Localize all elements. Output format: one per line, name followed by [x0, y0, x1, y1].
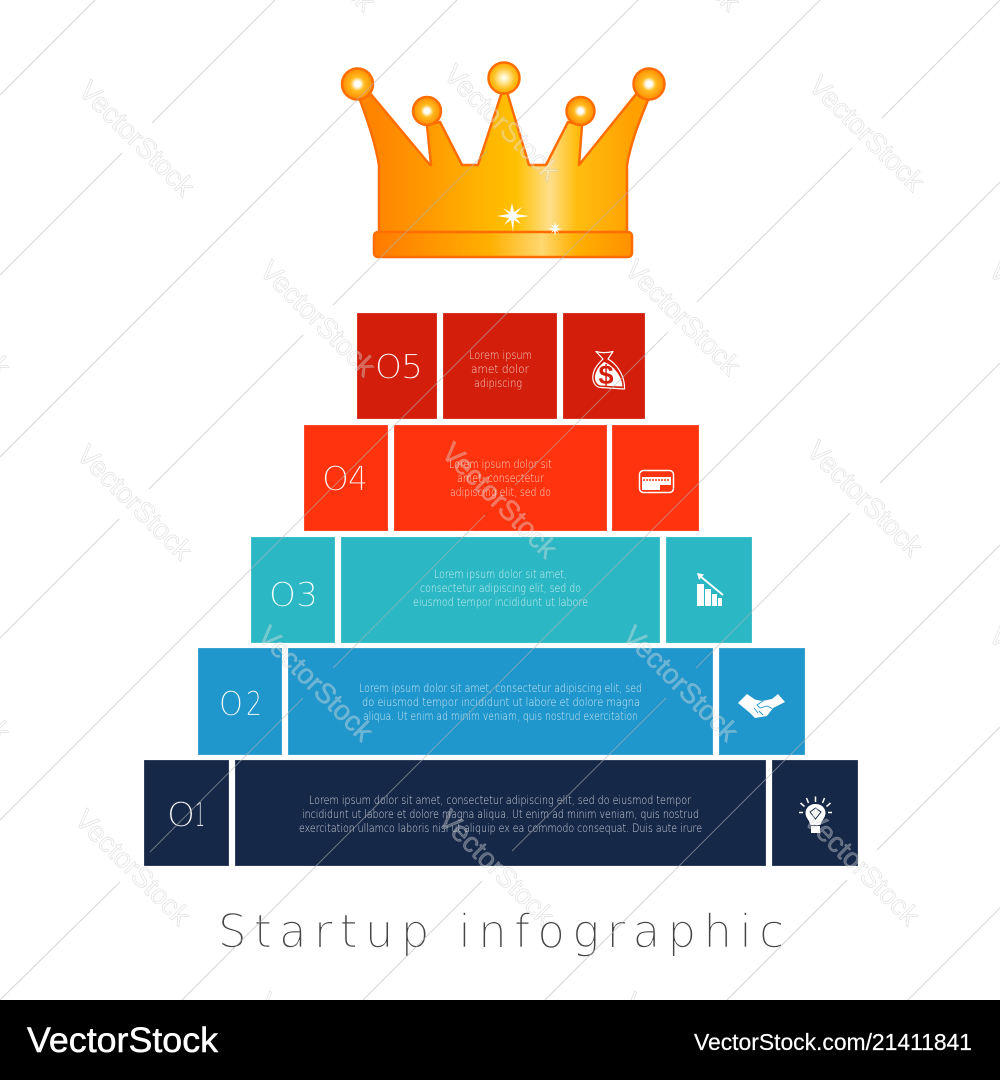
- icon tile: credit card: [612, 425, 699, 531]
- watermarks: VectorStock: [803, 70, 931, 198]
- panel: tier 4: [304, 425, 699, 531]
- icon tile: light bulb: [772, 760, 858, 866]
- number tile 01: O: [167, 795, 195, 834]
- text tile 03: consectetur adipiscing elit, sed do: [420, 581, 581, 595]
- number tile 02: O: [219, 684, 243, 723]
- text tile 04: amet, consectetur: [457, 471, 544, 485]
- watermarks: VectorStock: [73, 75, 201, 203]
- crown spikes and body: [360, 92, 648, 235]
- number tile 02: 2: [246, 684, 262, 723]
- number tile 01: [144, 760, 229, 866]
- watermarks: VectorStock: [69, 804, 197, 932]
- number tile 04: O: [322, 459, 349, 498]
- text tile 02: do eiusmod tempor incididunt ut labore et dolore magna: [362, 695, 640, 709]
- number tile 05: O: [375, 347, 402, 386]
- icon tile: money bag: [563, 313, 645, 419]
- text tile 04: adipiscing elit, sed do: [450, 485, 551, 499]
- text tile 02: Lorem ipsum dolor sit amet, consectetur adipiscing elit, sed: [359, 681, 642, 695]
- text tile 04: [394, 425, 607, 531]
- crown sparkles: [497, 203, 562, 236]
- watermarks: VectorStock: [71, 439, 199, 567]
- text tile 03: Lorem ipsum dolor sit amet,: [434, 567, 567, 581]
- watermarks: VectorStock: [433, 804, 561, 932]
- icon tile: money bag: $: [598, 360, 614, 390]
- number tile 01: 1: [195, 795, 205, 834]
- text tile 05: Lorem ipsum: [469, 348, 532, 362]
- title: Startup infographic: [218, 905, 784, 958]
- panel: tier 3: [251, 537, 752, 643]
- text tile 03: eiusmod tempor incididunt ut labore: [413, 595, 588, 609]
- icon tile: falling bar chart: [666, 537, 752, 643]
- watermarks: VectorStock: [254, 255, 382, 383]
- text tile 04: Lorem ipsum dolor sit: [449, 457, 552, 471]
- text tile 05: adipiscing: [474, 376, 522, 390]
- crown: [342, 62, 664, 257]
- crown balls: [342, 62, 664, 125]
- watermarks: VectorStock: [252, 620, 380, 748]
- footer bar: [0, 1000, 1000, 1080]
- number tile 03: 3: [296, 575, 318, 614]
- watermarks: VectorStock: [438, 59, 566, 187]
- number tile 04: 4: [348, 459, 368, 498]
- number tile 03: O: [269, 575, 296, 614]
- text tile 02: [288, 648, 713, 755]
- text tile 01: exercitation ullamco laboris nisi ut aliquip ex ea commodo consequat. Duis aute irure: [299, 821, 702, 835]
- text tile 01: Lorem ipsum dolor sit amet, consectetur adipiscing elit, sed do eiusmod tempor: [309, 793, 691, 807]
- watermarks: VectorStock: [798, 804, 926, 932]
- crown band: [374, 232, 632, 257]
- text tile 05: amet dolor: [471, 362, 529, 376]
- footer logo: VectorStock: [27, 1021, 219, 1060]
- panel: tier 2: [198, 648, 805, 755]
- text tile 02: aliqua. Ut enim ad minim veniam, quis nostrud exercitation: [363, 709, 638, 723]
- text tile 03: [341, 537, 660, 643]
- number tile 05: [357, 313, 437, 419]
- number tile 05: 5: [401, 347, 423, 386]
- text tile 05: [443, 313, 557, 419]
- panel: tier 1: [144, 760, 858, 866]
- text tile 01: [235, 760, 766, 866]
- number tile 04: [304, 425, 388, 531]
- watermarks: VectorStock: [801, 435, 929, 563]
- number tile 03: [251, 537, 335, 643]
- panel: tier 5: [357, 313, 645, 419]
- watermarks: VectorStock: [436, 437, 564, 565]
- number tile 02: [198, 648, 282, 755]
- watermarks: VectorStock: [619, 254, 747, 382]
- footer image id: VectorStock.com/21411841: [694, 1029, 972, 1055]
- text tile 01: incididunt ut labore et dolore magna aliqua. Ut enim ad minim veniam, quis nostrud: [302, 807, 699, 821]
- icon tile: handshake: [719, 648, 805, 755]
- watermarks: VectorStock: [617, 620, 745, 748]
